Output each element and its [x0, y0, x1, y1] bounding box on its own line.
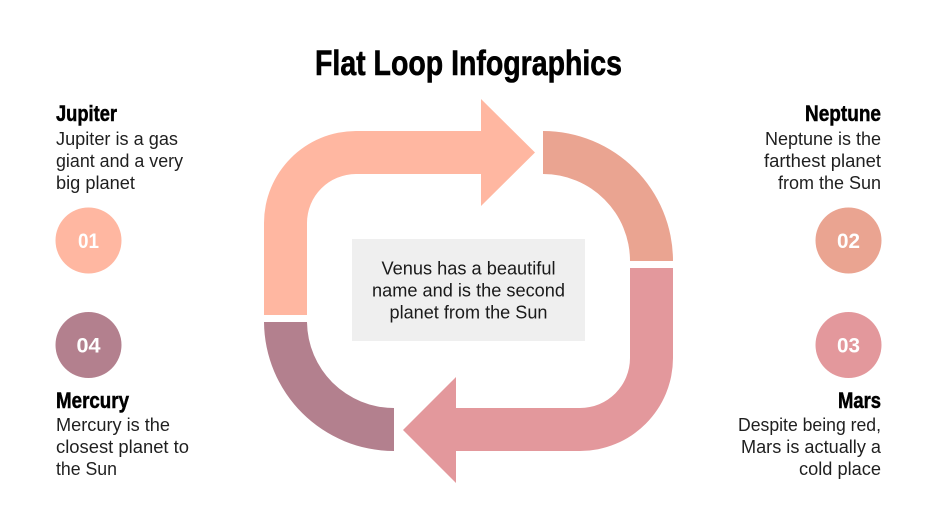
arrow: segment 1: [264, 99, 535, 315]
badge: 03: 03: [837, 334, 860, 358]
text block: Neptune: farthest planet: [764, 151, 881, 171]
text block: Jupiter: big planet: [56, 173, 135, 193]
title: Flat Loop Infographics: [315, 44, 622, 83]
text block: Jupiter: giant and a very: [56, 151, 183, 171]
arc: segment 4: [264, 322, 394, 451]
text block: Neptune: Neptune: [805, 101, 881, 126]
text block: Neptune: Neptune is the: [765, 129, 881, 149]
center text box: planet from the Sun: [390, 302, 548, 322]
text block: Mercury: closest planet to: [56, 437, 189, 457]
center text box: [352, 239, 585, 341]
arc: segment 2: [543, 131, 673, 261]
badge: 04: 04: [76, 334, 101, 358]
text block: Mercury: the Sun: [56, 459, 117, 479]
arrow: segment 3: [403, 268, 673, 483]
text block: Mars: cold place: [799, 459, 881, 479]
text block: Mercury: Mercury is the: [56, 415, 170, 435]
center text box: Venus has a beautiful: [382, 258, 556, 278]
text block: Jupiter: Jupiter: [56, 101, 117, 126]
center text box: name and is the second: [372, 280, 565, 300]
badge: 04: [56, 312, 122, 378]
text block: Mars: [738, 388, 882, 479]
text block: Mercury: [56, 388, 189, 479]
loop diagram: [264, 99, 673, 483]
text block: Jupiter: Jupiter is a gas: [56, 129, 178, 149]
badge: 02: [816, 208, 882, 274]
badge: 01: 01: [78, 230, 99, 253]
text block: Neptune: from the Sun: [778, 173, 881, 193]
text block: Neptune: [764, 101, 881, 193]
text block: Mars: Mars is actually a: [741, 437, 882, 457]
badge: 03: [816, 312, 882, 378]
badge: 01: [56, 208, 122, 274]
badge: 02: 02: [837, 230, 860, 253]
text block: Mars: Mars: [838, 388, 881, 413]
text block: Mars: Despite being red,: [738, 415, 881, 435]
text block: Jupiter: [56, 101, 183, 193]
text block: Mercury: Mercury: [56, 388, 130, 413]
